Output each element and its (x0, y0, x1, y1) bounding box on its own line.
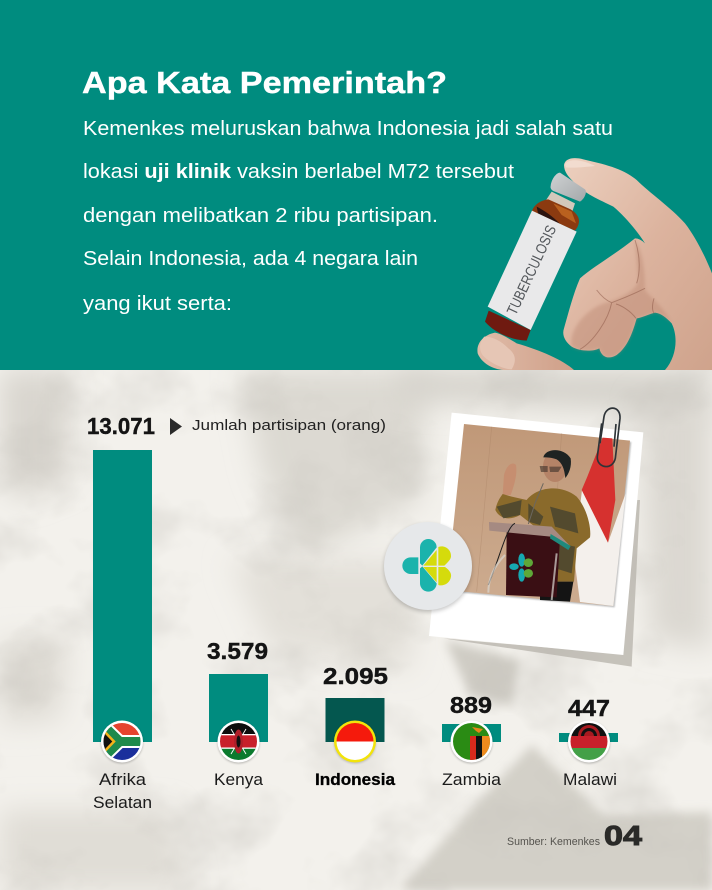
speaker head (543, 451, 567, 482)
finger shading (571, 240, 672, 357)
value: 3.579: 3.579 (207, 638, 268, 664)
bar: Indonesia (326, 698, 384, 742)
speaker trousers (540, 582, 573, 602)
speaker glasses (540, 466, 562, 472)
value: 2.095: 2.095 (323, 663, 388, 689)
label: Zambia: Zambia (442, 771, 502, 789)
microphone (528, 483, 543, 524)
legend: jumlah partisipan (170, 417, 386, 435)
bar: Zambia (442, 724, 501, 742)
card shadow (443, 500, 640, 667)
lectern (506, 532, 560, 597)
bar chart (87, 413, 618, 742)
speaker raised hand (503, 464, 516, 495)
intro text block (83, 118, 613, 315)
label: Kenya: Kenya (214, 771, 264, 789)
speaker batik shirt (495, 488, 590, 582)
source credit: Sumber: Kemenkes (507, 836, 600, 848)
flag: Kenya (218, 720, 260, 764)
arrow marker (170, 418, 182, 435)
stand poles (488, 553, 557, 600)
wall panel seams (477, 427, 562, 592)
intro text block: Kemenkes meluruskan bahwa Indonesia jadi salah satu (83, 118, 613, 140)
finger creases (580, 240, 654, 349)
vial neck (545, 192, 575, 213)
bar: Kenya (209, 674, 268, 742)
title: Apa Kata Pemerintah? (82, 65, 447, 100)
page number: 04 (604, 820, 643, 851)
intro text block: yang ikut serta: (83, 293, 232, 315)
label: Indonesia: Indonesia (315, 771, 396, 789)
polaroid photo card (429, 408, 643, 667)
paper clip (597, 408, 620, 467)
lectern edge (550, 534, 571, 550)
flag: white (574, 490, 626, 606)
teal header panel (0, 0, 712, 370)
bar: Malawi (559, 733, 618, 742)
logo yellow petals (423, 550, 437, 566)
logo teal petals (402, 557, 418, 574)
flag: Malawi (568, 720, 610, 764)
batik pattern (497, 500, 578, 573)
lectern cable (488, 523, 515, 585)
value: 13.071: 13.071 (87, 413, 155, 439)
flag: South Africa (100, 720, 143, 764)
intro text block: Selain Indonesia, ada 4 negara lain (83, 248, 418, 270)
vial liquid top (532, 199, 579, 231)
vial label text: TUBERCULOSIS (504, 223, 560, 318)
flag: Indonesia (334, 720, 376, 764)
country labels (93, 771, 617, 812)
value: 447: 447 (568, 695, 610, 721)
label: Afrika Selatan: Afrika (99, 771, 147, 789)
value: 889: 889 (450, 692, 492, 718)
lectern top (489, 522, 571, 547)
bar: Afrika Selatan (93, 450, 152, 742)
thumb nail (480, 337, 515, 369)
intro text block: dengan melibatkan 2 ribu partisipan. (83, 205, 438, 227)
photo shadow (448, 425, 631, 607)
photo: hand holding tuberculosis vial (477, 158, 712, 370)
flag: Zambia (450, 720, 492, 764)
flag: red (582, 438, 615, 543)
hand and fingers silhouette (563, 158, 712, 370)
hand (563, 158, 712, 370)
speaker hair (543, 450, 571, 478)
label: Selatan (second line): Selatan (93, 794, 152, 812)
thumb (477, 333, 574, 370)
photo background wall (447, 424, 630, 606)
vial label (488, 211, 577, 330)
legend label: Jumlah partisipan (orang) (192, 417, 386, 434)
white card (429, 413, 643, 655)
ministry logo badge (384, 522, 472, 612)
vial liquid bottom (485, 311, 531, 341)
vial cap (551, 173, 586, 202)
intro text block: lokasi uji klinik vaksin berlabel M72 tersebut (83, 161, 514, 183)
lectern logo (509, 553, 533, 582)
fingernail highlight (565, 160, 595, 168)
label: Malawi: Malawi (563, 771, 617, 789)
textured paper background (0, 370, 712, 890)
